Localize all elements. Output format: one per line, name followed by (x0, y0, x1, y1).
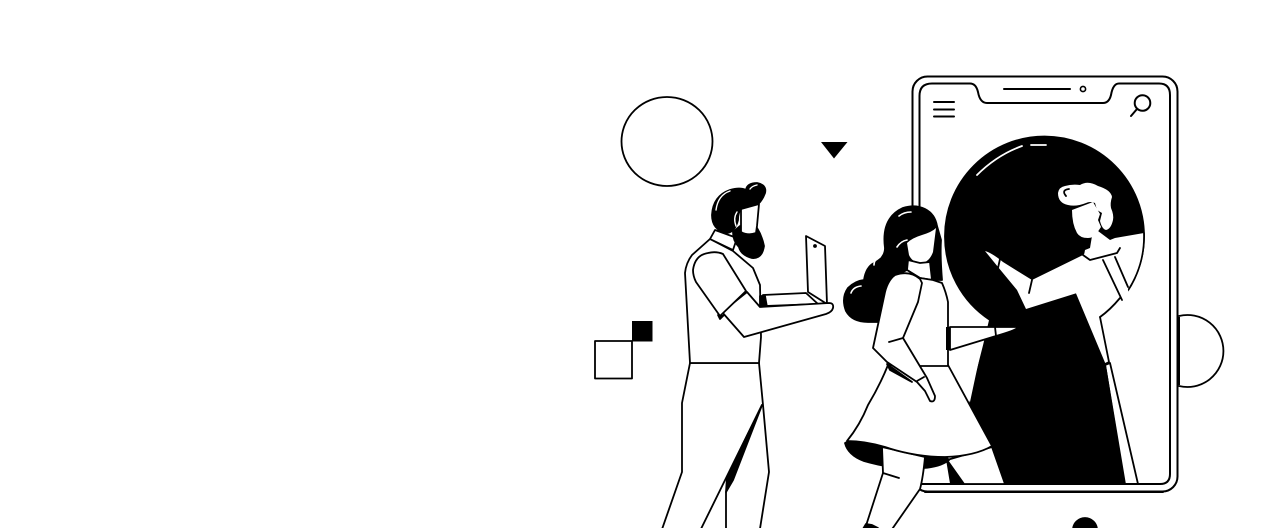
skirt (847, 365, 992, 457)
speaker and camera (1004, 86, 1086, 92)
black triangle under skirt (947, 460, 964, 484)
hair (712, 183, 765, 233)
back skirt shadow (845, 435, 949, 468)
hair curl (1064, 189, 1069, 196)
hair (1058, 183, 1113, 230)
forearm (722, 292, 833, 337)
pants (660, 363, 769, 528)
icon: search (1131, 95, 1150, 116)
torso (685, 239, 761, 363)
phone frame bottom edge (925, 491, 1163, 493)
phone frame (912, 76, 1178, 492)
decorative triangle (821, 142, 848, 158)
arm shadow (887, 364, 912, 382)
laptop (760, 236, 827, 307)
pant inner seam (698, 405, 762, 528)
circle edge beside torso (1127, 233, 1144, 292)
back leg (947, 447, 1005, 484)
hair highlights (851, 212, 911, 293)
black dot at bottom (1073, 518, 1097, 528)
face (741, 204, 759, 234)
extended arm (946, 327, 1018, 350)
bent arm with sleeve (873, 273, 935, 401)
phone (912, 76, 1180, 492)
half circle behind phone (1179, 315, 1223, 387)
decorative circle (622, 97, 712, 186)
leg (1105, 363, 1138, 484)
arm lines and cuff (998, 257, 1128, 317)
pant shadow (726, 405, 762, 492)
sleeve (693, 252, 746, 316)
man with laptop (660, 183, 833, 528)
white cut-out right of the keyhole (1075, 291, 1135, 483)
neck (1083, 231, 1120, 260)
shoe (863, 524, 878, 528)
torso wedge (1077, 233, 1144, 320)
keyhole: black shape (945, 136, 1144, 484)
collar line (1083, 248, 1120, 260)
hair (844, 206, 942, 322)
sleeve and wrist lines (889, 338, 924, 381)
icon: menu (934, 102, 954, 116)
front leg (863, 447, 925, 528)
face (1072, 202, 1101, 238)
man inside phone (985, 183, 1144, 484)
arm (985, 248, 1130, 317)
white gap beside keyhole (947, 327, 986, 402)
knee mark (883, 473, 899, 478)
torso right outline (1100, 300, 1117, 364)
woman (844, 206, 1018, 528)
neck (907, 260, 932, 280)
highlights on circle (977, 145, 1046, 175)
face (907, 228, 936, 263)
beard (733, 226, 764, 258)
hair highlights (716, 185, 757, 226)
decorative squares (595, 321, 652, 378)
phone screen with notch (920, 84, 1170, 484)
neck (710, 230, 737, 250)
front torso (888, 270, 948, 366)
sleeve shadow (718, 315, 724, 319)
